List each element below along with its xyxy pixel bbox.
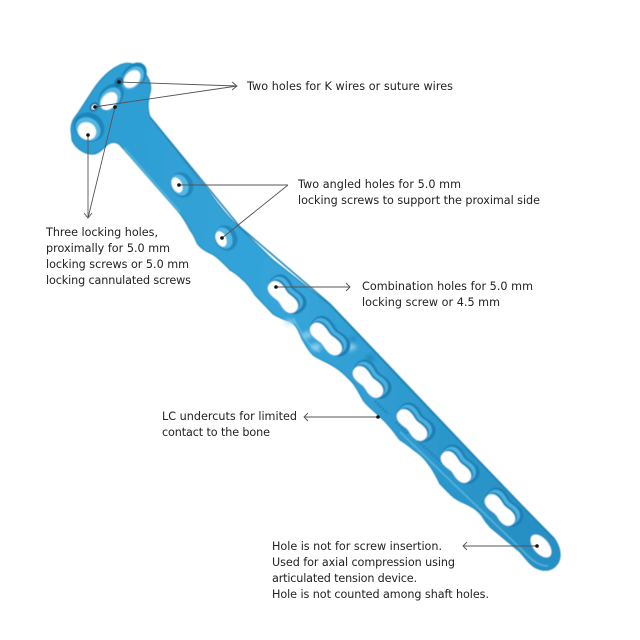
callout: end hole: Used for axial compression using <box>272 556 455 569</box>
glare patches <box>284 320 356 350</box>
callout: angled holes: Two angled holes for 5.0 mm <box>297 178 461 191</box>
callout: combination holes: Combination holes for 5.0 mm <box>362 280 533 293</box>
callout: LC undercuts: LC undercuts for limited <box>162 410 297 423</box>
callout: angled holes <box>177 178 540 240</box>
callout: end hole <box>272 540 539 601</box>
callout: three locking holes: locking screws or 5.0 mm <box>46 258 189 271</box>
locking holes in head <box>68 57 152 148</box>
callout: LC undercuts <box>162 410 380 439</box>
dark spots <box>327 326 374 360</box>
K-wire holes <box>88 76 125 113</box>
callout: end hole: articulated tension device. <box>272 572 417 585</box>
bone plate <box>68 57 560 570</box>
callout: three locking holes: Three locking holes, <box>45 226 158 239</box>
callout: three locking holes <box>45 105 191 287</box>
highlight along shaft <box>124 148 548 566</box>
angled holes <box>167 169 241 254</box>
end oval hole <box>527 531 555 561</box>
callout: three locking holes: locking cannulated screws <box>46 274 191 287</box>
callout: K wires: Two holes for K wires or suture wires <box>246 80 453 93</box>
callout: end hole: Hole is not counted among shaft holes. <box>272 588 489 601</box>
callout: combination holes <box>274 280 533 309</box>
combination holes <box>263 270 528 532</box>
callout: LC undercuts: contact to the bone <box>162 426 270 439</box>
callout: three locking holes: proximally for 5.0 mm <box>46 242 170 255</box>
dark edge along shaft <box>150 117 553 538</box>
callout: angled holes: locking screws to support the proximal side <box>298 194 540 207</box>
callout: end hole: Hole is not for screw insertion. <box>272 540 442 553</box>
plate body <box>71 63 560 570</box>
engraved markings <box>375 401 445 466</box>
callout: K wires <box>93 80 453 109</box>
callout: combination holes: locking screw or 4.5 mm <box>362 296 500 309</box>
